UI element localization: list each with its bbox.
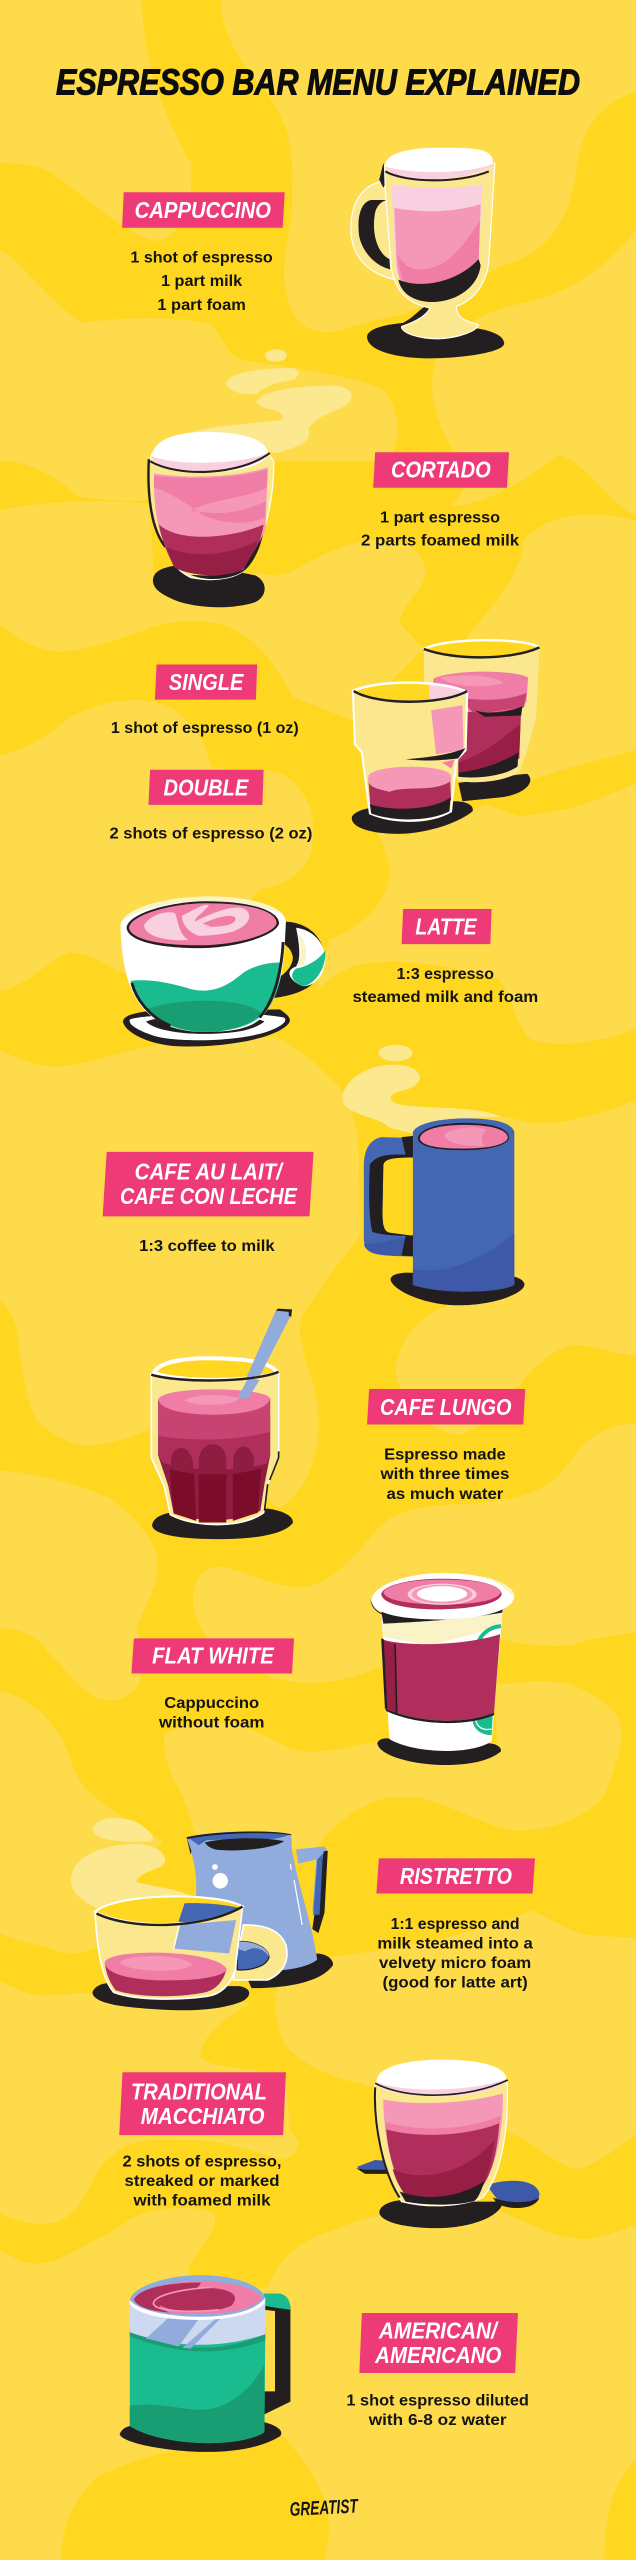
label: single: SINGLE: [169, 669, 244, 695]
description: traditional macchiato: streaked or marked: [125, 2173, 279, 2190]
description: cappuccino: 1 shot of espresso: [130, 249, 273, 266]
panel: cafe au lait: [103, 1045, 524, 1305]
panel: flat white: [131, 1573, 514, 1765]
panel: traditional macchiato: [119, 2060, 539, 2228]
description: latte: 1:3 espresso: [397, 966, 494, 983]
label: double: [148, 770, 264, 805]
label: cappuccino: [122, 192, 285, 228]
description: latte: [352, 966, 538, 1006]
description: cortado: [361, 509, 520, 550]
panel: single and double: [110, 640, 539, 842]
description: cortado: 1 part espresso: [380, 509, 500, 526]
description: traditional macchiato: with foamed milk: [132, 2193, 271, 2210]
description: double: 2 shots of espresso (2 oz): [110, 825, 312, 842]
label: cortado: [373, 452, 509, 488]
label: americano: [359, 2313, 518, 2373]
icon: two espresso glasses: [352, 640, 539, 834]
description: ristretto: milk steamed into a: [377, 1936, 533, 1953]
label: cafe au lait: CAFE CON LECHE: [120, 1183, 298, 1209]
description: cafe lungo: as much water: [387, 1486, 503, 1503]
label: flat white: FLAT WHITE: [152, 1643, 275, 1669]
icon: milk pitcher and glass with steam: [71, 1818, 333, 2010]
description: cafe au lait: 1:3 coffee to milk: [139, 1238, 275, 1255]
label: single: [155, 664, 257, 700]
icon: macchiato glass with spoon: [356, 2060, 539, 2228]
label: cafe au lait: [103, 1152, 314, 1216]
icon: green travel mug: [120, 2275, 290, 2452]
icon: takeaway cup: [370, 1573, 514, 1765]
label: traditional macchiato: [119, 2072, 286, 2135]
description: ristretto: (good for latte art): [382, 1975, 528, 1992]
label: latte: LATTE: [415, 913, 477, 939]
description: ristretto: 1:1 espresso and: [391, 1916, 520, 1933]
label: flat white: [131, 1638, 294, 1673]
label: latte: [402, 909, 492, 944]
description: cappuccino: 1 part foam: [157, 297, 246, 314]
description: americano: [346, 2392, 529, 2429]
description: cortado: 2 parts foamed milk: [361, 533, 520, 550]
label: americano: AMERICANO: [374, 2342, 502, 2368]
icon: cappuccino glass: [351, 148, 504, 358]
description: flat white: without foam: [158, 1715, 264, 1732]
panel: cappuccino: [122, 148, 504, 358]
label: cafe lungo: CAFE LUNGO: [380, 1394, 512, 1420]
icon: blue mug with steam: [343, 1045, 524, 1305]
label: americano: AMERICAN/: [378, 2317, 499, 2343]
label: cafe lungo: [367, 1389, 525, 1424]
logo: Greatist: GREATIST: [289, 2495, 360, 2521]
icon: lungo glass with spoon: [151, 1309, 293, 1539]
icon: cortado glass with steam: [148, 349, 352, 607]
description: ristretto: [377, 1916, 533, 1992]
panel: americano: [120, 2275, 529, 2452]
description: flat white: Cappuccino: [164, 1695, 259, 1712]
label: cafe au lait: CAFE AU LAIT/: [135, 1159, 284, 1185]
panel: latte: [120, 896, 538, 1047]
panel: cortado: [148, 349, 520, 607]
panel: ristretto: [71, 1818, 535, 2010]
description: americano: 1 shot espresso diluted: [346, 2392, 529, 2409]
label: double: DOUBLE: [163, 774, 249, 801]
label: traditional macchiato: MACCHIATO: [141, 2103, 265, 2129]
description: flat white: [158, 1695, 264, 1732]
description: americano: with 6-8 oz water: [368, 2412, 507, 2429]
description: traditional macchiato: [122, 2153, 281, 2210]
panel: cafe lungo: [151, 1309, 525, 1539]
label: ristretto: RISTRETTO: [400, 1863, 512, 1889]
description: traditional macchiato: 2 shots of espresso,: [122, 2153, 281, 2171]
label: ristretto: [376, 1858, 535, 1893]
label: cortado: CORTADO: [391, 456, 491, 483]
description: cappuccino: [130, 249, 273, 314]
description: cafe lungo: [379, 1447, 509, 1503]
description: cafe lungo: Espresso made: [384, 1447, 506, 1464]
icon: latte cup and saucer: [120, 896, 325, 1047]
description: single: 1 shot of espresso (1 oz): [111, 720, 299, 737]
description: cafe lungo: with three times: [379, 1466, 509, 1483]
description: cappuccino: 1 part milk: [161, 273, 243, 290]
description: ristretto: velvety micro foam: [379, 1955, 531, 1972]
description: latte: steamed milk and foam: [352, 989, 538, 1006]
label: traditional macchiato: TRADITIONAL: [131, 2079, 267, 2105]
label: cappuccino: CAPPUCCINO: [135, 197, 271, 223]
